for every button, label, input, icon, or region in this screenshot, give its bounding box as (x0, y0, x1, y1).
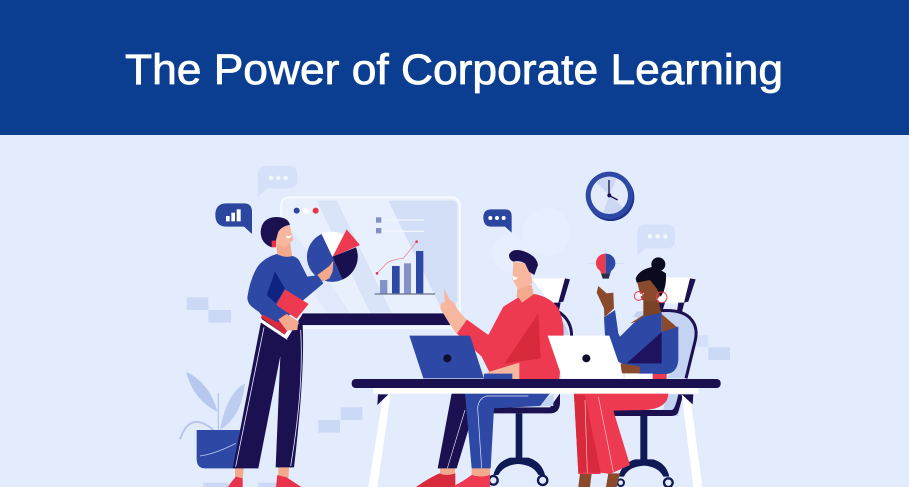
seated woman (574, 257, 678, 487)
icon: faint speech bubble (258, 166, 297, 197)
shirt (457, 294, 564, 379)
hair (636, 267, 666, 297)
hair (509, 250, 538, 275)
plant (180, 372, 245, 468)
raised arm (604, 310, 624, 360)
pie chart (307, 229, 360, 282)
ankles (440, 467, 490, 477)
earring (272, 241, 276, 247)
woman's chair (613, 277, 696, 487)
tray highlight (302, 326, 458, 329)
decorative squares left (187, 297, 362, 487)
panel: title banner (0, 0, 909, 135)
white laptop (548, 336, 653, 379)
icon: chart speech bubble (215, 203, 252, 234)
waist (652, 373, 667, 379)
book hand (278, 314, 298, 331)
neck (517, 285, 534, 303)
face (637, 277, 664, 302)
decorative squares right (350, 335, 730, 420)
sweater (247, 254, 323, 320)
man's chair (489, 278, 572, 485)
scene: gear, table and colleagues (350, 172, 730, 487)
icon: light bulb (588, 247, 623, 279)
sweater shadow (267, 272, 285, 303)
forearm (485, 363, 519, 379)
ankles (235, 466, 289, 479)
bar chart (375, 240, 435, 295)
icon: man's speech bubble (483, 209, 512, 233)
trousers (574, 393, 668, 474)
feet (578, 473, 620, 487)
earrings (634, 292, 643, 300)
hair bun (651, 257, 665, 271)
blue trouser leg (465, 393, 550, 468)
panel: illustration background (0, 135, 909, 487)
icon: faint speech bubble right (637, 224, 675, 256)
face (512, 262, 532, 290)
table (368, 388, 702, 487)
blouse (615, 313, 678, 374)
legend (376, 217, 424, 233)
faint gear (492, 208, 571, 272)
presenter woman (228, 217, 333, 487)
shoulder skin (630, 314, 678, 333)
neck (643, 300, 662, 318)
smile (286, 235, 292, 238)
scene: presenter and whiteboard (180, 166, 460, 487)
shirt shadow (504, 313, 541, 364)
icon: clock (586, 172, 634, 221)
pointing hand (317, 261, 333, 282)
window dots (294, 208, 319, 214)
raised hand (440, 288, 467, 334)
table top (352, 379, 721, 388)
blue laptop (409, 336, 512, 379)
forearm (621, 363, 640, 373)
shoes (228, 475, 301, 487)
shoes (416, 473, 490, 487)
seated man (416, 250, 564, 487)
neck (276, 242, 292, 259)
trousers (233, 317, 303, 468)
whiteboard (281, 197, 460, 313)
title: The Power of Corporate Learning (125, 46, 783, 94)
blouse shadow (627, 332, 662, 363)
lower arm (247, 297, 283, 323)
hand (597, 286, 614, 317)
face (273, 225, 293, 247)
book (261, 318, 287, 340)
dark trouser leg (438, 393, 469, 468)
hair (261, 217, 290, 247)
board tray (298, 313, 452, 325)
board reflections (317, 201, 392, 313)
